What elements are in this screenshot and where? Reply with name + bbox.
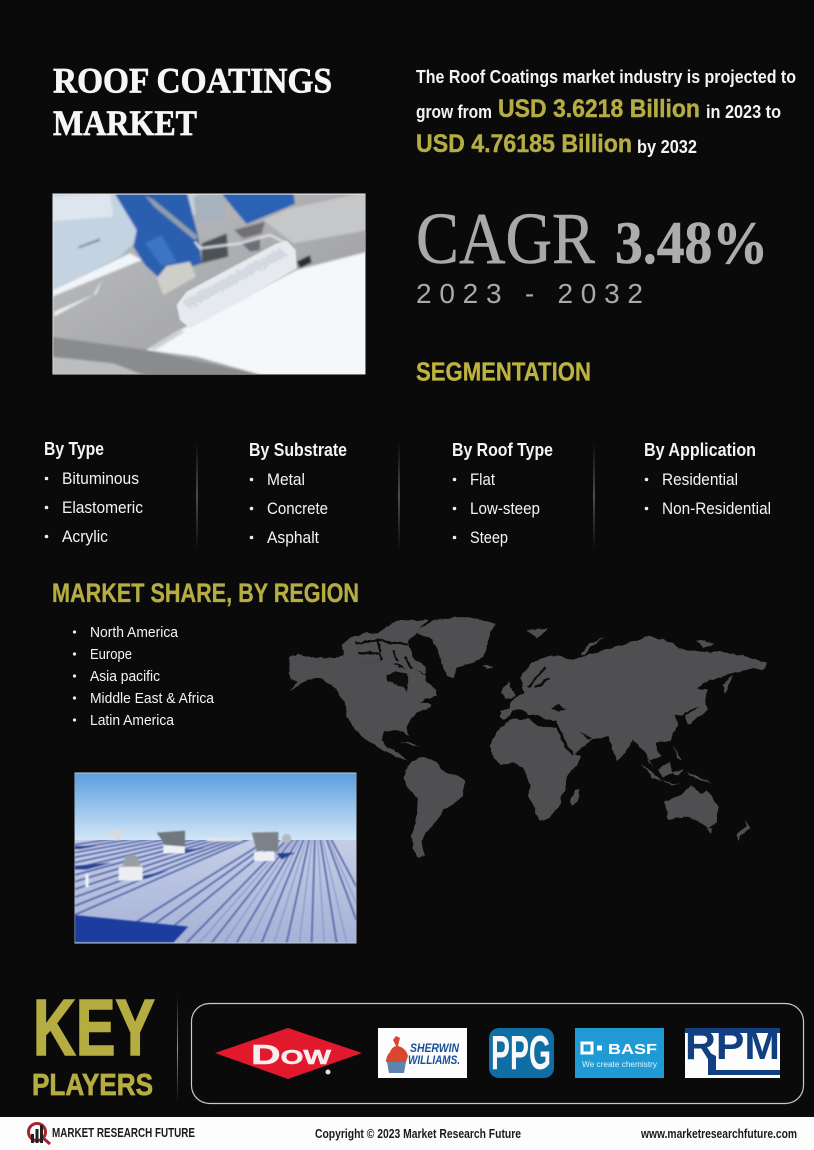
logo: BASF: BASF bbox=[608, 1041, 657, 1058]
segment: by type: Elastomeric bbox=[62, 498, 143, 517]
inland seas bbox=[550, 704, 593, 755]
intro text: market projection bbox=[416, 67, 796, 158]
segment: by substrate: By Substrate bbox=[249, 439, 347, 460]
intro text: market projection: by 2032 bbox=[637, 137, 697, 157]
heading: key players bbox=[32, 983, 155, 1102]
world map bbox=[288, 617, 767, 857]
Madagascar bbox=[570, 788, 579, 806]
logo: BASF: We create chemistry bbox=[582, 1060, 657, 1069]
segment: by application: Non-Residential bbox=[662, 499, 771, 518]
region list bbox=[73, 624, 215, 729]
photo: roller coating a roof bbox=[50, 191, 368, 377]
CAGR bbox=[416, 198, 768, 309]
logo: PPG: PPG bbox=[491, 1027, 551, 1080]
Tasmania and New Zealand bbox=[707, 820, 752, 840]
intro text: market projection: USD 4.76185 Billion bbox=[416, 130, 632, 158]
footer logo bbox=[28, 1124, 50, 1144]
logo: Dow bbox=[215, 1028, 362, 1079]
panel: key player logos bbox=[192, 1004, 804, 1104]
footer bar bbox=[0, 1117, 814, 1150]
segment: by application: Residential bbox=[662, 470, 738, 489]
segment: by roof type: Flat bbox=[470, 470, 495, 489]
Australia bbox=[665, 787, 718, 828]
heading: key players: KEY bbox=[33, 983, 155, 1072]
region list: North America bbox=[90, 624, 179, 641]
logo: RPM: RPM bbox=[685, 1022, 780, 1068]
paint roller bbox=[177, 241, 297, 328]
islands of Asia and the Arctic bbox=[482, 628, 733, 784]
segment: by substrate bbox=[249, 439, 347, 547]
Caribbean bbox=[400, 742, 422, 747]
heading: market share by region: MARKET SHARE, BY REGION bbox=[52, 578, 359, 608]
intro text: market projection: USD 3.6218 Billion bbox=[498, 95, 700, 123]
title: ROOF COATINGS bbox=[53, 60, 332, 100]
Eurasia bbox=[500, 636, 767, 762]
segment: by roof type bbox=[452, 439, 553, 547]
region list: Europe bbox=[90, 646, 132, 663]
title bbox=[53, 60, 332, 143]
segment: by type: By Type bbox=[44, 438, 104, 459]
segment: by substrate: Concrete bbox=[267, 499, 328, 518]
Baltic Sea bbox=[528, 667, 550, 687]
logo: PPG bbox=[489, 1027, 554, 1080]
Greenland bbox=[415, 617, 495, 678]
logo: Sherwin-Williams: WILLIAMS. bbox=[408, 1055, 460, 1067]
title: MARKET bbox=[53, 103, 197, 143]
segment: by application: By Application bbox=[644, 439, 756, 460]
CAGR: CAGR bbox=[416, 198, 595, 279]
segment: by roof type: Low-steep bbox=[470, 499, 540, 518]
CAGR: 2023 - 2032 bbox=[416, 278, 643, 309]
heading: segmentation: SEGMENTATION bbox=[416, 356, 591, 386]
logo: Sherwin-Williams bbox=[378, 1028, 467, 1078]
footer bar: Copyright © 2023 Market Research Future bbox=[315, 1127, 521, 1141]
footer bar: MARKET RESEARCH FUTURE bbox=[52, 1126, 195, 1140]
segment: by substrate: Metal bbox=[267, 470, 305, 489]
logo: BASF bbox=[575, 1028, 664, 1078]
region list: Asia pacific bbox=[90, 668, 160, 685]
logo: Sherwin-Williams: SHERWIN bbox=[410, 1043, 460, 1055]
logo: Dow: Dow bbox=[251, 1039, 331, 1070]
Africa bbox=[490, 718, 582, 821]
region list: Middle East & Africa bbox=[90, 690, 215, 707]
CAGR: 3.48% bbox=[615, 210, 768, 276]
segment: by type: Bituminous bbox=[62, 469, 139, 488]
Hudson Bay bbox=[387, 672, 408, 693]
segment: by application bbox=[644, 439, 771, 518]
Arctic islands bbox=[343, 620, 428, 674]
segment: by roof type: Steep bbox=[470, 528, 508, 547]
segment: by substrate: Asphalt bbox=[267, 528, 319, 547]
photo: metal roof bbox=[74, 772, 356, 944]
North America bbox=[288, 655, 437, 761]
Arctic channels bbox=[355, 641, 412, 668]
intro text: market projection: in 2023 to bbox=[706, 102, 781, 122]
segment: by roof type: By Roof Type bbox=[452, 439, 553, 460]
segment: by type: Acrylic bbox=[62, 527, 108, 546]
intro text: market projection: grow from bbox=[416, 102, 492, 122]
region list: Latin America bbox=[90, 712, 175, 729]
heading: key players: PLAYERS bbox=[32, 1067, 153, 1102]
South America bbox=[403, 757, 466, 857]
segment: by type bbox=[44, 438, 143, 546]
